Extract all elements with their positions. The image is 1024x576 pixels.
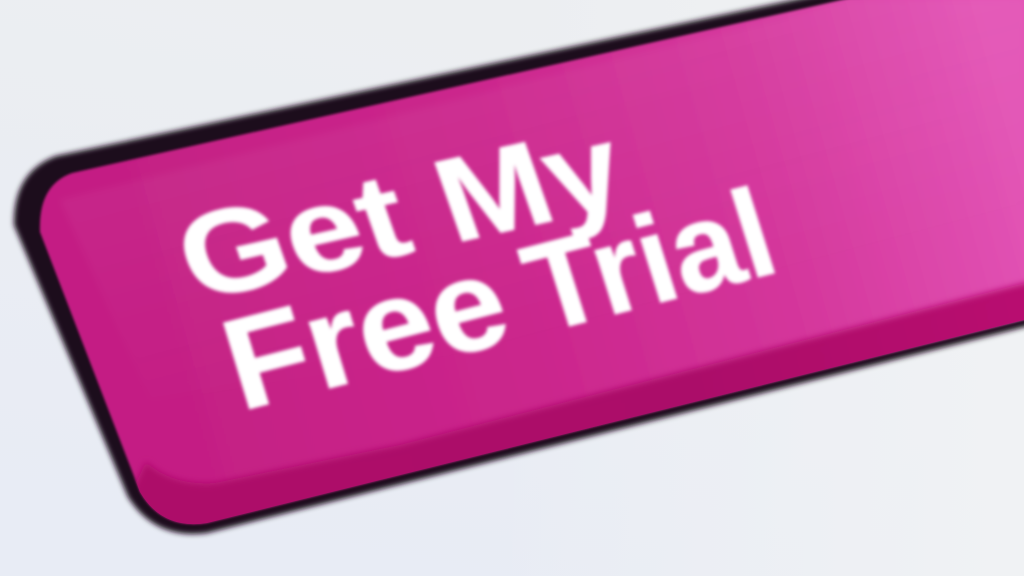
label line one: [160, 100, 640, 326]
label line two: [207, 163, 791, 438]
button face sheen: [60, 0, 1024, 400]
button lower lip: [130, 274, 1024, 540]
label line one: My: [418, 100, 640, 267]
label line two: Free: [207, 228, 524, 438]
button label: [160, 100, 791, 438]
label line two: Trial: [508, 163, 791, 359]
label line one: Get: [160, 149, 426, 326]
